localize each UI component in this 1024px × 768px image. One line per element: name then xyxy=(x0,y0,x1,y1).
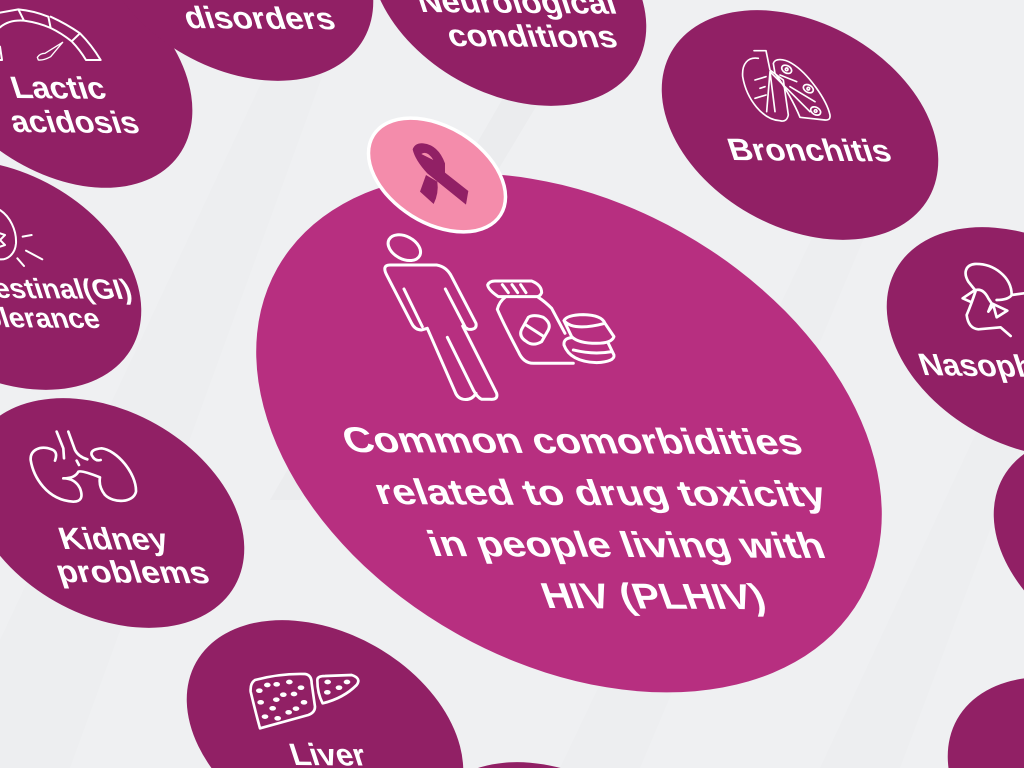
icon: ribbon xyxy=(413,143,468,205)
label: neurological conditions xyxy=(412,0,622,54)
icon: pill bottle and coins xyxy=(488,281,614,363)
heading: central title: Common comorbidities xyxy=(336,419,808,462)
panel: neurological conditions xyxy=(329,0,687,153)
label: kidney problems: Kidney xyxy=(54,521,173,557)
panel: right edge circle xyxy=(953,388,1024,712)
label: bronchitis: Bronchitis xyxy=(723,132,896,168)
heading: central title: in people living with xyxy=(421,523,831,566)
panel: kidney problems xyxy=(0,351,285,675)
panel: gastrointestinal intolerance xyxy=(0,113,182,437)
icon: person xyxy=(384,230,497,400)
label: lactic acidosis: Lactic xyxy=(6,70,110,106)
icon: gauge xyxy=(0,9,101,60)
panel: bottom right circle xyxy=(907,630,1024,768)
heading: central title: related to drug toxicity xyxy=(368,471,832,514)
label: gastrointestinal (GI) intolerance xyxy=(0,272,136,335)
panel: bronchitis xyxy=(621,0,979,287)
icon: lungs xyxy=(743,51,830,121)
panel: disorders xyxy=(56,0,414,128)
heading: central title: HIV (PLHIV) xyxy=(535,575,771,617)
label: lactic acidosis xyxy=(5,70,144,140)
label: lactic acidosis: acidosis xyxy=(5,104,144,140)
icon: liver xyxy=(251,674,358,728)
label: kidney problems: problems xyxy=(51,554,214,590)
icon: stomach pain xyxy=(0,210,42,266)
panel: bottom circle xyxy=(381,715,739,768)
panel: liver xyxy=(146,573,504,768)
badge: awareness ribbon xyxy=(348,95,526,255)
panel: nasopharyngitis xyxy=(846,180,1024,504)
icon: kidneys xyxy=(31,432,136,502)
panel: lactic acidosis xyxy=(0,0,238,237)
heading: central title xyxy=(336,419,832,617)
icon: head and throat xyxy=(963,264,1024,336)
label: disorders: disorders xyxy=(179,0,340,36)
label: neurological conditions: conditions xyxy=(442,18,622,54)
panel: central topic xyxy=(164,68,974,768)
label: kidney problems xyxy=(51,521,214,590)
